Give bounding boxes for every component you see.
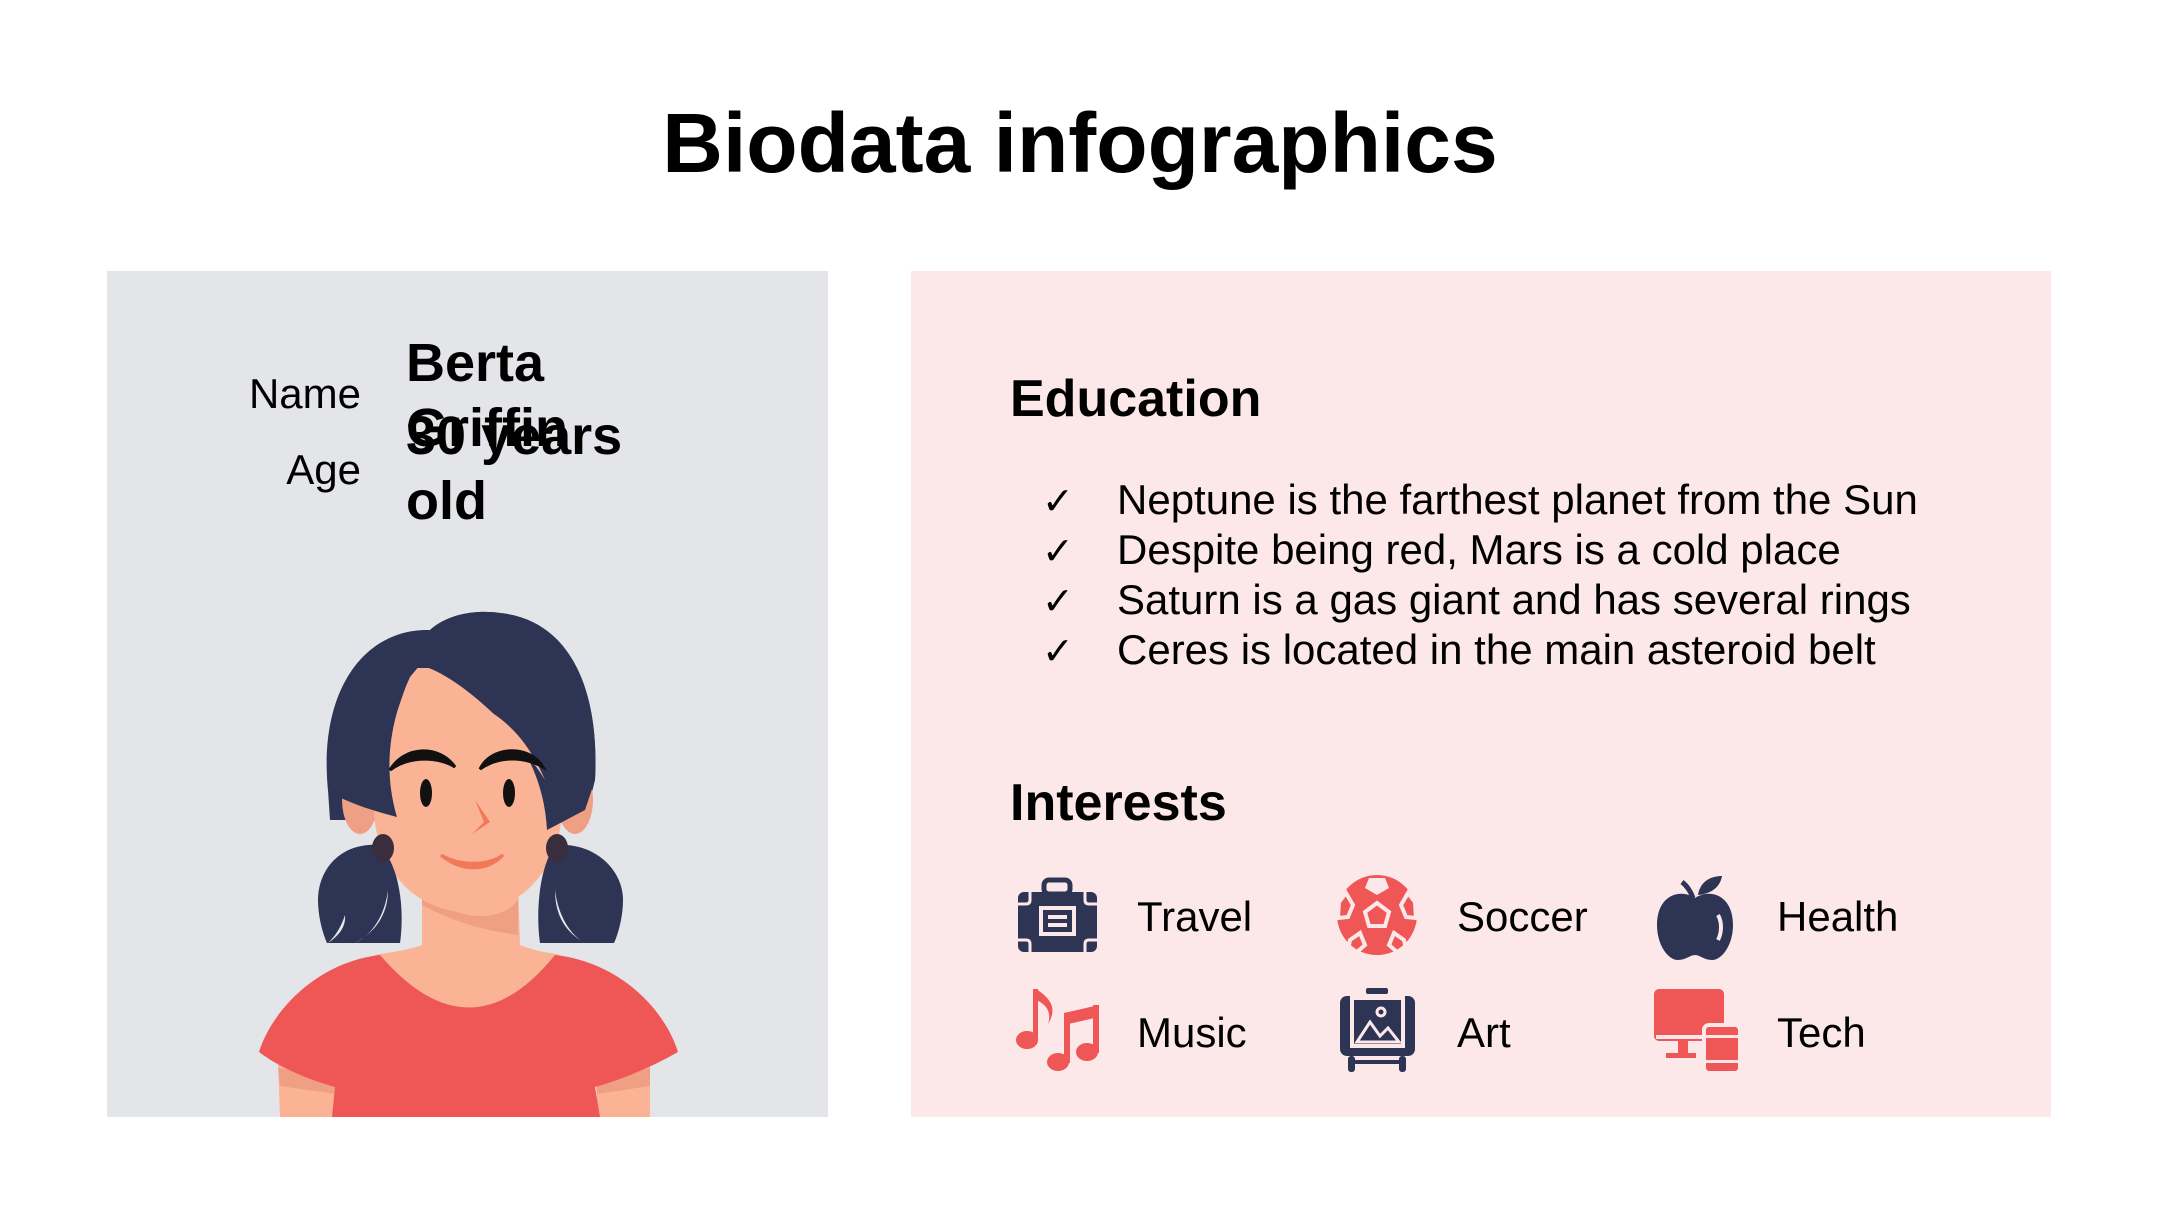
value: name	[406, 333, 568, 458]
panel: profile	[107, 271, 828, 1117]
text: art: Art	[1457, 1009, 1511, 1056]
text: travel: Travel	[1137, 893, 1252, 940]
list: education	[1042, 476, 1918, 673]
label: name: Name	[249, 370, 361, 417]
icon: health	[1657, 876, 1733, 960]
value: name: Berta	[406, 333, 545, 393]
text: music: Music	[1137, 1009, 1247, 1056]
list: education: ✓	[1042, 481, 1074, 523]
title: Biodata infographics	[662, 96, 1498, 190]
label: age: Age	[286, 446, 361, 493]
list: education: Neptune is the farthest planet from the Sun	[1117, 476, 1918, 523]
icon: soccer	[1337, 875, 1417, 955]
icon: music	[1016, 989, 1099, 1071]
icon: travel	[1018, 880, 1097, 952]
icon: art	[1340, 988, 1415, 1072]
list: education: Saturn is a gas giant and has several rings	[1117, 576, 1911, 623]
value: age	[406, 406, 622, 531]
heading: education: Education	[1010, 370, 1261, 428]
text: soccer: Soccer	[1457, 893, 1588, 940]
list: education: ✓	[1042, 631, 1074, 673]
value: name: Griffin	[406, 398, 568, 458]
list: education: Despite being red, Mars is a cold place	[1117, 526, 1841, 573]
icon: tech	[1654, 989, 1740, 1073]
text: tech: Tech	[1777, 1009, 1866, 1056]
value: age: old	[406, 471, 487, 531]
list: education: ✓	[1042, 581, 1074, 623]
value: age: 30 years	[406, 406, 622, 466]
heading: interests: Interests	[1010, 774, 1227, 832]
avatar: girl	[259, 612, 678, 1117]
text: health: Health	[1777, 893, 1898, 940]
panel: details	[911, 271, 2051, 1117]
list: education: ✓	[1042, 531, 1074, 573]
list: education: Ceres is located in the main asteroid belt	[1117, 626, 1876, 673]
